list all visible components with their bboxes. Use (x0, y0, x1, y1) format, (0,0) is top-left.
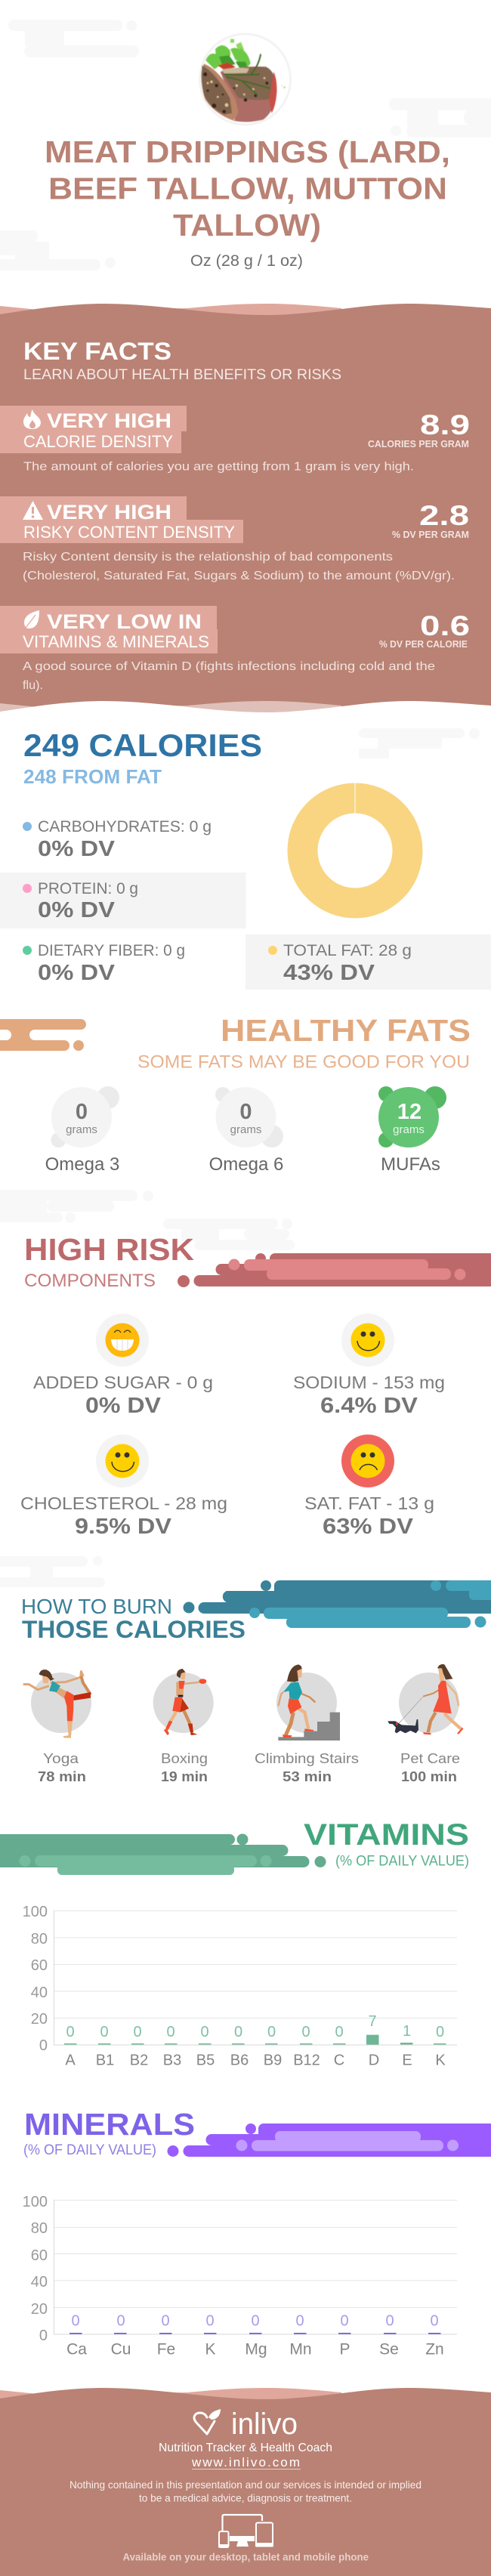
bar chart: minerals: 0 (71, 2313, 80, 2330)
stat: omega 3: 0 (76, 1100, 88, 1124)
disclaimer (69, 2479, 422, 2503)
stat: omega 6: 0 (239, 1100, 252, 1124)
component: added sugar: ADDED SUGAR - 0 g (33, 1373, 213, 1392)
bar chart: minerals: K (205, 2340, 216, 2358)
activity: pet care (388, 1664, 463, 1784)
component: cholesterol: 9.5% DV (75, 1515, 172, 1539)
bar chart: vitamins (23, 1904, 457, 2068)
panel: vitamins (0, 1818, 469, 2068)
fact: calorie density: VERY HIGH (47, 409, 171, 432)
component: sodium: SODIUM - 153 mg (293, 1373, 445, 1392)
bar chart: vitamins: B12 (293, 2052, 320, 2068)
title: TALLOW) (173, 208, 321, 242)
availability note: Available on your desktop, tablet and mobile phone (122, 2550, 369, 2562)
legend: protein (23, 880, 138, 922)
decorative band: burn calories (183, 1580, 491, 1628)
component: cholesterol: CHOLESTEROL - 28 mg (20, 1493, 227, 1513)
disclaimer: to be a medical advice, diagnosis or treatment. (139, 2491, 352, 2503)
bar chart: vitamins: 60 (31, 1957, 48, 1974)
fact: vitamins and minerals: % DV PER CALORIE (379, 639, 468, 650)
component: saturated fat (304, 1435, 434, 1539)
component: sodium (293, 1314, 445, 1418)
bar chart: minerals: Cu (111, 2340, 131, 2358)
bar chart: vitamins: 0 (166, 2024, 175, 2040)
legend: dietary fiber (23, 942, 185, 985)
decorative band: healthy fats (0, 1019, 86, 1051)
bar chart: minerals: 0 (295, 2313, 304, 2330)
subheading: healthy fats: SOME FATS MAY BE GOOD FOR YOU (137, 1052, 470, 1073)
bar chart: vitamins: E (402, 2052, 412, 2068)
bar chart: vitamins: 0 (335, 2024, 344, 2040)
component: sodium: 6.4% DV (320, 1394, 418, 1418)
bar chart: vitamins: 40 (31, 1985, 48, 2001)
legend: dietary fiber: DIETARY FIBER: 0 g (38, 942, 185, 959)
bar chart: vitamins: 1 (403, 2023, 411, 2040)
activity: climbing stairs: 53 min (283, 1769, 332, 1784)
subheading: vitamins: (% OF DAILY VALUE) (335, 1854, 469, 1869)
activity: yoga (23, 1669, 91, 1784)
component: saturated fat: 63% DV (323, 1515, 414, 1539)
bar chart: minerals: Se (379, 2340, 399, 2358)
bar chart: vitamins: K (435, 2052, 446, 2068)
stat: mufas: 12 (397, 1100, 422, 1124)
bar chart: vitamins: C (334, 2052, 344, 2068)
stat: mufas: grams (393, 1123, 425, 1136)
panel: healthy fats (0, 1013, 471, 1175)
bar chart: vitamins: 0 (301, 2024, 310, 2040)
bar chart: minerals: 80 (31, 2220, 48, 2237)
fact: calorie density (0, 406, 470, 473)
stat: omega 3: Omega 3 (45, 1154, 119, 1175)
panel: high risk (20, 1232, 491, 1539)
bar chart: vitamins: 0 (200, 2024, 209, 2040)
heading: healthy fats: HEALTHY FATS (221, 1013, 471, 1048)
title: MEAT DRIPPINGS (LARD, (45, 134, 450, 169)
bar chart: vitamins: B3 (163, 2052, 181, 2068)
activity: boxing (153, 1669, 214, 1784)
bar chart: vitamins: 100 (23, 1904, 48, 1920)
fact: calorie density: 8.9 (420, 409, 470, 440)
stat: mufas: MUFAs (381, 1154, 440, 1175)
bar chart: minerals: 20 (31, 2301, 48, 2318)
fact: vitamins and minerals: A good source of Vitamin D (fights infections including cold and the (23, 660, 435, 673)
heading: vitamins: VITAMINS (304, 1818, 469, 1852)
stat: omega 6: Omega 6 (209, 1154, 283, 1175)
bar chart: minerals: Ca (66, 2340, 87, 2358)
legend: protein: PROTEIN: 0 g (38, 880, 138, 897)
component: added sugar (33, 1314, 213, 1418)
component: added sugar: 0% DV (85, 1394, 162, 1418)
legend: total fat (268, 942, 412, 985)
bar chart: minerals: Zn (425, 2340, 444, 2358)
bar chart: vitamins: B5 (196, 2052, 215, 2068)
fact: risky content density: VERY HIGH (47, 501, 171, 524)
bar chart: minerals: 0 (39, 2327, 48, 2344)
bar chart: minerals: 0 (430, 2313, 439, 2330)
bar chart: minerals (23, 2194, 457, 2358)
activity: pet care: Pet Care (400, 1751, 460, 1766)
bar chart: vitamins: B6 (230, 2052, 249, 2068)
fact: risky content density: % DV PER GRAM (392, 530, 469, 540)
bar chart: minerals: Mg (245, 2340, 267, 2358)
bar chart: vitamins: 0 (267, 2024, 276, 2040)
activity: yoga: Yoga (43, 1751, 79, 1766)
panel: minerals (23, 2107, 491, 2358)
activity: pet care: 100 min (401, 1769, 457, 1784)
panel: footer (0, 2388, 491, 2576)
decorative band: high risk (178, 1253, 491, 1287)
subheading: calories from fat: 248 FROM FAT (23, 765, 162, 788)
fact: vitamins and minerals: VERY LOW IN (47, 610, 202, 633)
stat: mufas (378, 1086, 446, 1175)
legend: carbohydrates: CARBOHYDRATES: 0 g (38, 818, 212, 836)
bar chart: minerals: 40 (31, 2274, 48, 2290)
serving size: Oz (28 g / 1 oz) (190, 252, 303, 270)
donut chart (302, 783, 408, 903)
bar chart: vitamins: 0 (234, 2024, 242, 2040)
activity: boxing: Boxing (161, 1751, 208, 1766)
heading: minerals: MINERALS (24, 2107, 195, 2142)
decorative band: vitamins (0, 1834, 326, 1875)
fact: vitamins and minerals: flu). (23, 679, 43, 692)
bar chart: minerals: 0 (161, 2313, 170, 2330)
bar chart: minerals: 0 (340, 2313, 349, 2330)
food image: steak with greens (199, 34, 290, 125)
bar chart: vitamins: 80 (31, 1931, 48, 1947)
legend: dietary fiber: 0% DV (38, 961, 116, 985)
subheading: components: COMPONENTS (24, 1271, 156, 1291)
bar chart: vitamins: B2 (130, 2052, 148, 2068)
title: BEEF TALLOW, MUTTON (48, 171, 447, 205)
decorative band: minerals (168, 2124, 491, 2157)
legend: total fat: TOTAL FAT: 28 g (283, 942, 412, 959)
bar chart: minerals: 0 (251, 2313, 260, 2330)
heading: high risk: HIGH RISK (24, 1232, 194, 1267)
activity: climbing stairs: Climbing Stairs (255, 1751, 359, 1766)
bar chart: vitamins: 7 (368, 2013, 377, 2030)
icon: devices (218, 2515, 273, 2547)
heading: those calories: THOSE CALORIES (22, 1616, 246, 1643)
bar chart: vitamins: 20 (31, 2011, 48, 2028)
title (45, 134, 450, 242)
fact: calorie density: CALORIES PER GRAM (368, 439, 469, 449)
activity: climbing stairs (255, 1664, 359, 1784)
heading: key facts: KEY FACTS (23, 338, 171, 365)
bar chart: vitamins: 0 (100, 2024, 109, 2040)
component: saturated fat: SAT. FAT - 13 g (304, 1493, 434, 1513)
fact: vitamins and minerals: VITAMINS & MINERALS (23, 632, 209, 651)
fact: risky content density: 2.8 (419, 500, 469, 531)
fact: vitamins and minerals: 0.6 (420, 610, 470, 641)
activity: boxing: 19 min (161, 1769, 208, 1784)
bar chart: minerals: P (339, 2340, 350, 2358)
bar chart: vitamins: 0 (133, 2024, 142, 2040)
legend: total fat: 43% DV (283, 961, 375, 985)
subheading: minerals: (% OF DAILY VALUE) (23, 2142, 156, 2158)
bar chart: minerals: 60 (31, 2247, 48, 2264)
bar chart: vitamins: D (369, 2052, 379, 2068)
bar chart: vitamins: 0 (39, 2037, 48, 2054)
legend: carbohydrates: 0% DV (38, 837, 116, 861)
fact: risky content density (0, 496, 469, 582)
activity: yoga: 78 min (38, 1769, 86, 1784)
bar chart: minerals: Fe (157, 2340, 175, 2358)
subheading: key facts: LEARN ABOUT HEALTH BENEFITS OR RISKS (23, 366, 341, 383)
component: cholesterol (20, 1435, 227, 1539)
stat: omega 6 (209, 1087, 283, 1175)
logo: inlivo (194, 2408, 298, 2441)
stat: omega 6: grams (230, 1123, 261, 1136)
heading: calories: 249 CALORIES (23, 727, 262, 763)
fact: risky content density: (Cholesterol, Saturated Fat, Sugars & Sodium) to the amount (%DV/gr). (23, 570, 455, 582)
bar chart: vitamins: A (65, 2052, 76, 2068)
bar chart: minerals: 100 (23, 2194, 48, 2210)
panel: how to burn calories (21, 1580, 491, 1784)
panel: key facts (0, 304, 491, 718)
bar chart: minerals: 0 (205, 2313, 215, 2330)
logo: inlivo: inlivo (231, 2408, 298, 2441)
fact: calorie density: CALORIE DENSITY (23, 432, 173, 451)
legend: protein: 0% DV (38, 898, 116, 922)
website link: www.inlivo.com (191, 2455, 300, 2469)
fact: risky content density: Risky Content density is the relationship of bad components (23, 551, 393, 564)
disclaimer: Nothing contained in this presentation and our services is intended or implied (69, 2479, 422, 2491)
stat: omega 3: grams (66, 1123, 97, 1136)
bar chart: vitamins: 0 (436, 2024, 444, 2040)
stat: omega 3 (45, 1086, 119, 1175)
bar chart: vitamins: B1 (96, 2052, 114, 2068)
fact: vitamins and minerals (0, 606, 470, 692)
fact: calorie density: The amount of calories you are getting from 1 gram is very high. (23, 461, 414, 473)
bar chart: vitamins: B9 (264, 2052, 282, 2068)
bar chart: minerals: 0 (116, 2313, 125, 2330)
panel: calories (0, 727, 491, 990)
bar chart: minerals: 0 (385, 2313, 394, 2330)
bar chart: vitamins: 0 (66, 2024, 75, 2040)
tagline: Nutrition Tracker & Health Coach (159, 2442, 332, 2454)
legend: carbohydrates (23, 818, 212, 861)
heading: how to burn: HOW TO BURN (21, 1595, 172, 1618)
fact: risky content density: RISKY CONTENT DENSITY (23, 523, 235, 542)
bar chart: minerals: Mn (289, 2340, 312, 2358)
